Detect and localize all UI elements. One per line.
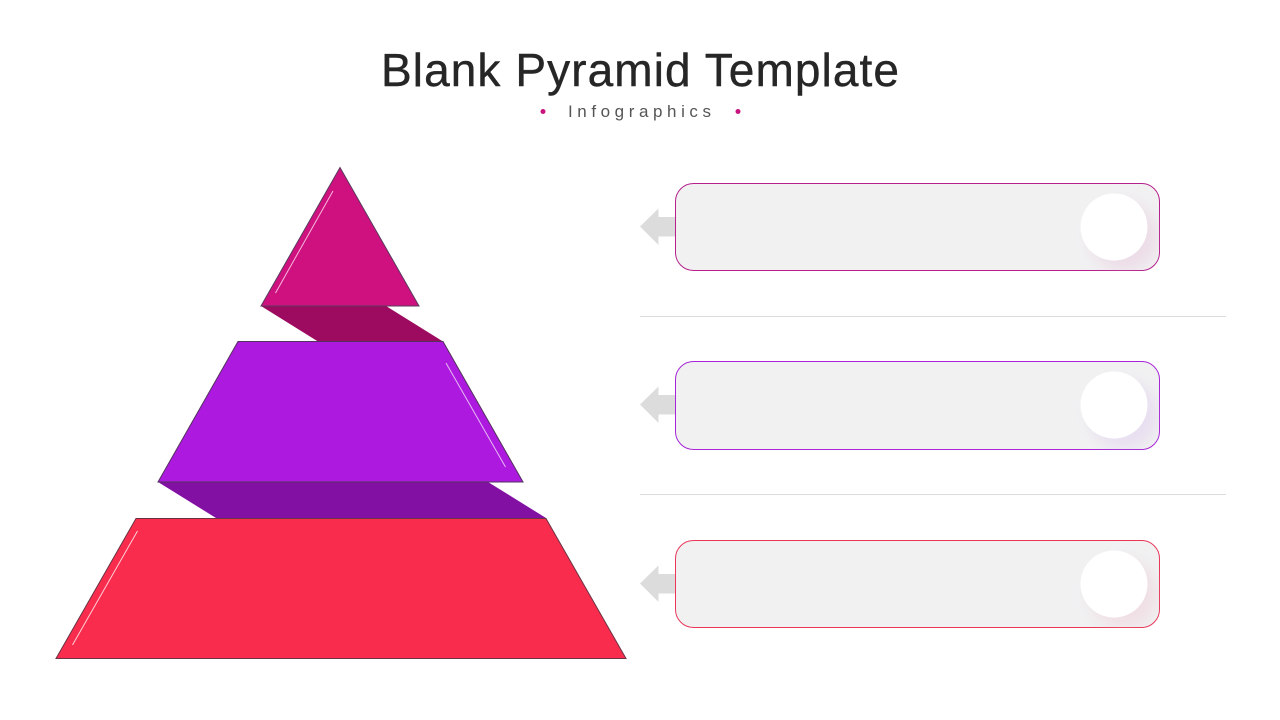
panel: middle card bbox=[640, 362, 1160, 450]
arrow: top card bbox=[640, 208, 676, 245]
pyramid middle shadow face bbox=[158, 482, 546, 518]
subtitle bbox=[540, 102, 740, 121]
top card circle shadow bbox=[1090, 203, 1158, 271]
middle card circle shadow bbox=[1090, 381, 1158, 449]
divider lower bbox=[640, 494, 1226, 496]
pyramid middle highlight bbox=[446, 363, 506, 467]
pyramid top tier bbox=[261, 168, 419, 306]
panel: top card bbox=[640, 184, 1160, 271]
bottom card circle bbox=[1080, 550, 1148, 618]
pyramid bbox=[56, 168, 626, 658]
pyramid bottom highlight bbox=[72, 531, 138, 645]
middle card circle bbox=[1080, 372, 1148, 438]
pyramid top highlight bbox=[276, 191, 333, 293]
subtitle left dot bbox=[540, 109, 546, 114]
title: Blank Pyramid Template bbox=[381, 44, 899, 96]
panel: bottom card bbox=[640, 540, 1160, 628]
top card circle bbox=[1080, 194, 1148, 260]
divider upper bbox=[640, 316, 1226, 318]
pyramid top shadow face bbox=[261, 306, 443, 342]
arrow: bottom card bbox=[640, 566, 676, 602]
pyramid bottom tier bbox=[56, 518, 626, 658]
pyramid middle tier bbox=[158, 342, 523, 482]
bottom card circle shadow bbox=[1096, 566, 1160, 628]
top card box bbox=[676, 184, 1160, 270]
arrow: middle card bbox=[640, 386, 676, 423]
subtitle right dot bbox=[736, 109, 740, 114]
bottom card box bbox=[676, 540, 1160, 628]
subtitle text: Infographics bbox=[568, 102, 711, 121]
middle card box bbox=[676, 362, 1160, 450]
